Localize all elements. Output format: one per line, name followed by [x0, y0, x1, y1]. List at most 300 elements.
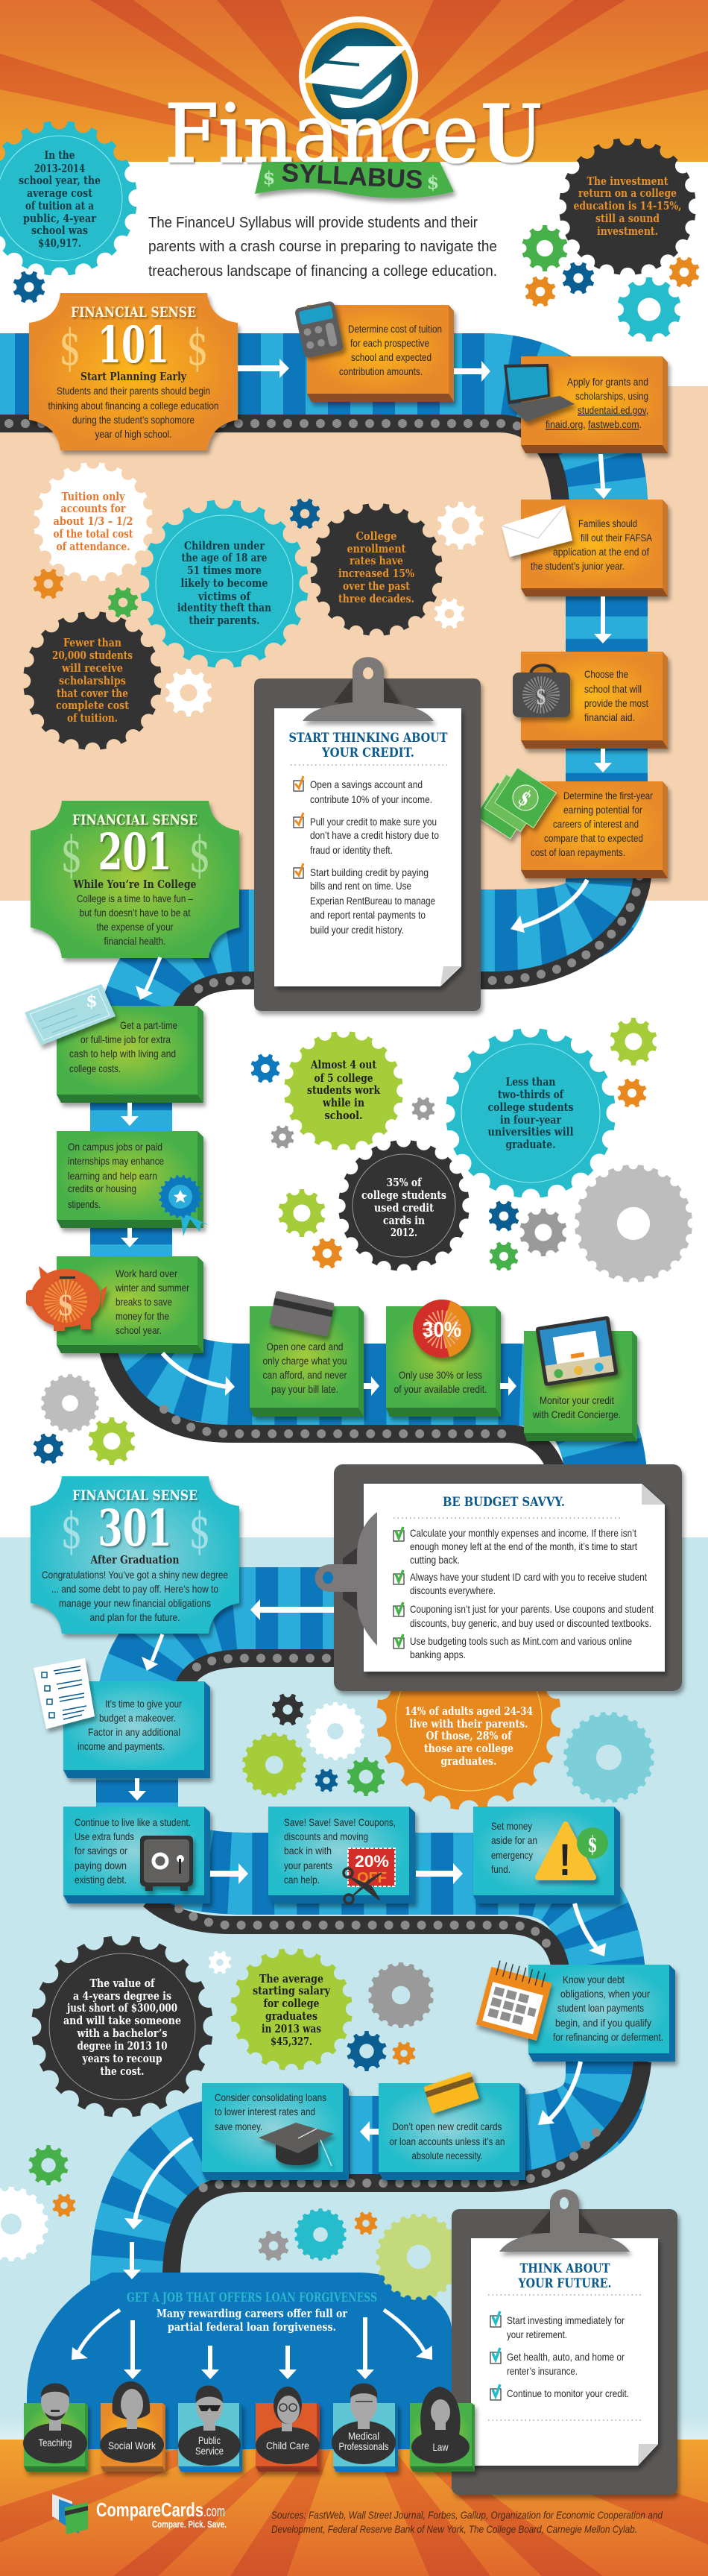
checklist: Pull your credit to make sure you: [310, 816, 437, 828]
step: open one card: [250, 1291, 364, 1417]
stat gear: value of degree: years to recoup: [82, 2052, 162, 2065]
step: use 30 percent: [386, 1300, 501, 1417]
stat gear: tuition share of attendance: Tuition only: [61, 490, 126, 503]
career tile: teaching: [23, 2383, 88, 2472]
step: part-time job: Get a part-time: [120, 1019, 177, 1031]
clipboard: start thinking about your credit: [254, 657, 481, 1011]
stat gear: tuition cost: $40,917.: [38, 236, 81, 250]
badge: financial sense 201: 201: [98, 822, 171, 881]
icon: laptop: [504, 364, 575, 422]
icon: money bag: $: [536, 681, 546, 710]
intro paragraph: treacherous landscape of financing a college education.: [148, 263, 497, 280]
stat gear: tuition cost: of tuition at a: [25, 199, 94, 212]
icon: award ribbon: [159, 1175, 209, 1236]
stat gear: graduation rate: [446, 1028, 616, 1198]
stat gear: college enrollment: increased 15%: [338, 567, 414, 580]
panel: loan forgiveness heading: partial federal loan forgiveness.: [168, 2320, 336, 2334]
step: open one card: only charge what you: [262, 1355, 347, 1367]
step: FAFSA application: application at the end of: [553, 546, 649, 558]
clipboard: start thinking about your credit: START THINKING ABOUT: [289, 731, 448, 746]
icon: yellow credit card: [423, 2071, 479, 2114]
step: emergency fund: emergency: [491, 1849, 533, 1861]
step: consolidate loans: [202, 2083, 349, 2180]
icon: coupon and scissors: OFF: [357, 1870, 387, 1886]
arrow: grants to FAFSA: [594, 454, 612, 499]
stat gear: tuition cost: school was: [31, 224, 88, 237]
icon: piggy bank: $: [57, 1285, 74, 1323]
paper: [274, 708, 461, 986]
arrow: FAFSA to school choice: [594, 596, 612, 643]
step: apply for grants: Apply for grants and: [567, 376, 648, 388]
icon: coupon and scissors: [344, 1848, 395, 1903]
step: internships: credits or housing: [68, 1182, 136, 1194]
arrow: job to internships: [121, 1103, 139, 1126]
checklist: [393, 1527, 654, 1660]
stat gear: credit card use: college students: [361, 1188, 446, 1202]
step: know your debt: student loan payments: [557, 2002, 644, 2014]
gear cluster: college section: [33, 1018, 692, 1465]
icon: warning sign and dollar coin: $: [587, 1832, 598, 1858]
checklist: Continue to monitor your credit.: [507, 2387, 629, 2399]
career tile: child care: [256, 2387, 320, 2472]
badge: financial sense 101: $: [60, 319, 80, 377]
checklist: Calculate your monthly expenses and income. If there isn’t: [410, 1527, 636, 1539]
stat gear: credit card use: 2012.: [391, 1226, 417, 1239]
stat gear: scholarships: Fewer than: [63, 636, 121, 649]
stat gear: tuition cost: school year, the: [19, 174, 101, 187]
stat gear: starting salary: $45,327.: [271, 2035, 312, 2048]
checklist: cutting back.: [410, 1554, 460, 1566]
paper: [364, 1484, 665, 1672]
step: determine cost of tuition: Determine cost of tuition: [348, 323, 442, 335]
step: budget makeover: income and payments.: [78, 1740, 165, 1752]
arrow: debt to credit cards: [538, 2062, 581, 2125]
stat gear: adults living with parents: graduates.: [441, 1754, 496, 1768]
stat gear: graduation rate: universities will: [487, 1125, 574, 1139]
arrow: clipboard to 301: [250, 1599, 334, 1620]
stat gear: value of degree: the cost.: [100, 2065, 145, 2078]
icon: piggy bank: [26, 1266, 107, 1331]
stat gear: students working: of 5 college: [315, 1071, 373, 1085]
step: first-year earning potential: Determine the first-year: [563, 790, 653, 802]
badge: financial sense 101: during the student’s sophomore: [72, 414, 195, 426]
checklist: your retirement.: [507, 2328, 567, 2340]
step: consolidate loans: to lower interest rates and: [215, 2106, 315, 2117]
step: choose school: school that will: [584, 683, 642, 695]
step: determine cost of tuition: contribution amounts.: [339, 365, 423, 377]
stat gear: identity theft: likely to become: [180, 576, 268, 590]
syllabus banner: SYLLABUS: [281, 158, 423, 195]
step: use 30 percent: Only use 30% or less: [399, 1369, 482, 1381]
step: first-year earning potential: careers of interest and: [553, 818, 639, 830]
checklist: [294, 776, 439, 936]
checklist: fraud or identity theft.: [310, 844, 393, 856]
stat gear: scholarships: scholarships: [59, 674, 126, 687]
step: determine cost of tuition: [294, 300, 454, 402]
clipboard: think about your future: YOUR FUTURE.: [518, 2276, 611, 2291]
stat gear: scholarships: [23, 611, 162, 750]
step: apply for grants: [504, 356, 668, 453]
checklist: [490, 2311, 629, 2400]
badge: financial sense 101: Start Planning Early: [80, 370, 187, 383]
stat gear: adults living with parents: [376, 1625, 561, 1810]
step: first-year earning potential: earning potential for: [563, 804, 642, 816]
stat gear: scholarships: will receive: [61, 661, 123, 675]
arrow: consolidating to career panel: [124, 2138, 192, 2229]
step: avoid new credit: [379, 2071, 525, 2180]
stat gear: value of degree: just short of $300,000: [66, 2001, 177, 2015]
step: choose school: provide the most: [584, 697, 648, 709]
clipboard: think about your future: [452, 2189, 677, 2495]
badge: financial sense 201: FINANCIAL SENSE: [72, 812, 197, 828]
stat gear: graduation rate: in four-year: [500, 1113, 562, 1127]
checklist: Use budgeting tools such as Mint.com and various online: [410, 1635, 632, 1647]
career tile: medical professionals: [332, 2383, 398, 2472]
panel: loan forgiveness heading: GET A JOB THAT OFFERS LOAN FORGIVENESS: [127, 2290, 377, 2305]
intro paragraph: [148, 215, 497, 280]
step: monitor credit: with Credit Concierge.: [532, 1408, 621, 1420]
step: work hard over breaks: winter and summer: [115, 1282, 189, 1294]
stat gear: adults living with parents: live with their parents.: [410, 1717, 528, 1731]
stat gear: identity theft: [140, 500, 309, 668]
stat gear: tuition share of attendance: accounts for: [61, 502, 126, 515]
step: first-year earning potential: [475, 768, 668, 878]
sources: Development, Federal Reserve Bank of New York, The College Board, Carnegie Mellon Cylab.: [271, 2523, 637, 2535]
stat gear: identity theft: victims of: [197, 590, 251, 603]
step: first-year earning potential: cost of loan repayments.: [531, 846, 625, 858]
stat gear: starting salary: starting salary: [253, 1984, 331, 1997]
step: determine cost of tuition: school and expected: [351, 351, 432, 363]
checklist: renter’s insurance.: [507, 2365, 578, 2377]
stat gear: college enrollment: rates have: [350, 554, 403, 567]
step: work hard over breaks: school year.: [116, 1324, 162, 1336]
stat gear: tuition cost: 2013-2014: [34, 162, 85, 175]
checklist: Start investing immediately for: [507, 2314, 625, 2326]
header logo mortarboard: [299, 16, 418, 136]
footer logo: CompareCards: .com: [203, 2504, 225, 2520]
icon: calculator: [294, 300, 344, 359]
checklist: discounts everywhere.: [410, 1584, 496, 1596]
arrow: down to career panel: [123, 2242, 141, 2279]
step: coupons: Save! Save! Save! Coupons,: [284, 1816, 396, 1828]
stat gear: scholarships: that cover the: [57, 687, 128, 700]
checklist: Couponing isn’t just for your parents. Use coupons and student: [410, 1603, 654, 1615]
step: know your debt: [476, 1959, 675, 2062]
stat gear: value of degree: a 4-years degree is: [73, 1989, 171, 2003]
stat gear: starting salary: [230, 1948, 353, 2070]
step: internships: learning and help earn: [68, 1170, 157, 1182]
badge: financial sense 301: 301: [98, 1499, 171, 1558]
step: live like a student: [63, 1807, 210, 1903]
conveyor track: [0, 374, 642, 2289]
career tile: medical professionals: Medical: [348, 2430, 379, 2442]
stat gear: starting salary: in 2013 was: [262, 2022, 321, 2035]
step: open one card: pay your bill late.: [271, 1383, 338, 1395]
icon: warning sign and dollar coin: !: [559, 1835, 571, 1885]
title FinanceU: Finance: [165, 88, 478, 181]
stat gear: adults living with parents: those are college: [424, 1742, 513, 1755]
clipboard: be budget savvy: [315, 1464, 682, 1691]
badge: financial sense 301: and plan for the future.: [89, 1611, 180, 1623]
badge: financial sense 201: $: [61, 826, 82, 884]
arrow: coupons to emergency fund: [416, 1863, 463, 1884]
stat gear: starting salary: for college: [264, 1997, 319, 2010]
stat gear: investment return: education is 14-15%,: [574, 199, 681, 212]
step: apply for grants: studentaid.ed.gov,: [578, 404, 648, 416]
step: part-time job: college costs.: [69, 1062, 121, 1074]
career tile: teaching: Teaching: [39, 2437, 72, 2449]
step: avoid new credit: or loan accounts unless it’s an: [389, 2135, 505, 2147]
icon: coupon and scissors: 20%: [355, 1852, 389, 1871]
arrow: emergency fund to debt: [575, 1903, 606, 1956]
stat gear: students working: while in: [322, 1096, 364, 1109]
stat gear: tuition cost: public, 4-year: [23, 212, 97, 225]
icon: paycheck: [25, 984, 116, 1045]
clipboard: be budget savvy: BE BUDGET SAVVY.: [443, 1495, 565, 1510]
icon: warning sign and dollar coin: [538, 1824, 608, 1885]
icon: envelope: [502, 506, 572, 557]
step: open one card: can afford, and never: [262, 1369, 347, 1381]
arrow: earning to section 201: [511, 880, 587, 933]
step: monitor credit: Monitor your credit: [540, 1394, 614, 1406]
checklist: build your credit history.: [310, 924, 404, 936]
step: internships: [57, 1131, 209, 1236]
step: consolidate loans: Consider consolidating loans: [215, 2091, 326, 2103]
title FinanceU: U: [481, 87, 542, 181]
icon: safe: [140, 1836, 193, 1891]
checklist: and report rental payments to: [310, 909, 426, 921]
footer logo: CompareCards: [52, 2494, 227, 2534]
career tile: social work: Social Work: [108, 2440, 157, 2451]
step: FAFSA application: the student’s junior year.: [531, 560, 625, 572]
step: coupons: back in with: [284, 1845, 332, 1857]
step: emergency fund: Set money: [491, 1820, 532, 1832]
stat gear: credit card use: used credit: [374, 1201, 434, 1215]
step: emergency fund: fund.: [491, 1863, 511, 1875]
stat gear: tuition share of attendance: of attendance.: [57, 540, 130, 553]
step: internships: stipends.: [68, 1198, 101, 1210]
step: know your debt: Know your debt: [563, 1974, 625, 1985]
career tile: public service: Public: [198, 2434, 221, 2446]
stat gear: identity theft: Children under: [184, 539, 265, 552]
clip: [315, 1512, 377, 1646]
stat gear: identity theft: their parents.: [189, 614, 259, 627]
checklist: bills and rent on time. Use: [310, 880, 411, 892]
badge: financial sense 301: [31, 1476, 239, 1634]
arrow: 101 to tuition: [238, 359, 289, 378]
footer logo: CompareCards: CompareCards: [96, 2498, 203, 2521]
stat gear: college enrollment: three decades.: [338, 592, 414, 605]
step: coupons: discounts and moving: [284, 1830, 368, 1842]
step: first-year earning potential: compare that to expected: [544, 832, 643, 844]
sources: [271, 2509, 663, 2535]
icon: paycheck: $: [86, 992, 98, 1011]
stat gear: tuition share of attendance: about 1/3 – 1/2: [54, 514, 133, 528]
step: FAFSA application: Families should: [578, 517, 637, 529]
checklist: discounts, buy generic, and buy used or discounted textbooks.: [410, 1617, 651, 1629]
badge: financial sense 201: $: [189, 826, 210, 884]
step: choose school: financial aid.: [584, 711, 635, 723]
checklist: banking apps.: [410, 1648, 466, 1660]
clipboard: start thinking about your credit: YOUR CREDIT.: [321, 746, 414, 760]
badge: financial sense 301: After Graduation: [90, 1553, 180, 1566]
checklist: contribute 10% of your income.: [310, 793, 432, 805]
career tile: law: Law: [432, 2441, 449, 2453]
arrow: makeover to live like a student: [128, 1778, 146, 1801]
syllabus banner: [255, 158, 454, 198]
badge: financial sense 101: FINANCIAL SENSE: [71, 304, 196, 321]
intro paragraph: The FinanceU Syllabus will provide students and their: [148, 215, 478, 231]
stat gear: investment return: investment.: [597, 224, 658, 238]
checklist: Open a savings account and: [310, 778, 423, 790]
header sunburst: [0, 0, 708, 164]
step: know your debt: for refinancing or deferment.: [553, 2031, 663, 2043]
footer sunburst: [0, 2440, 708, 2576]
step: live like a student: for savings or: [75, 1845, 127, 1857]
step: budget makeover: budget a makeover.: [99, 1712, 176, 1724]
stat gear: adults living with parents: 14% of adults aged 24-34: [405, 1704, 533, 1718]
checklist: don’t have a credit history due to: [310, 829, 439, 841]
stat gear: credit card use: [338, 1140, 470, 1271]
badge: financial sense 101: Students and their parents should begin: [57, 385, 210, 397]
stat gear: scholarships: complete cost: [56, 699, 129, 712]
stat gear: tuition cost: [0, 121, 137, 276]
stat gear: tuition cost: average cost: [27, 186, 92, 200]
stat gear: investment return: still a sound: [595, 212, 660, 225]
stat gear: college enrollment: College: [356, 529, 396, 543]
step: use 30 percent: of your available credit.: [393, 1383, 487, 1395]
stat gear: graduation rate: college students: [487, 1100, 574, 1114]
badge: financial sense 301: FINANCIAL SENSE: [72, 1487, 197, 1504]
stat gear: starting salary: graduates: [265, 2009, 317, 2023]
step: avoid new credit: Don’t open new credit cards: [392, 2120, 502, 2132]
icon: money bills: $: [513, 785, 536, 812]
arrows: to each career: [72, 2310, 432, 2379]
icon: money bag: [513, 665, 570, 717]
stat gear: investment return: [559, 138, 696, 275]
stat gear: investment return: The investment: [587, 174, 669, 188]
step: coupons: can help.: [284, 1874, 320, 1886]
syllabus banner: $: [427, 171, 439, 193]
arrow: card to 30 percent: [364, 1376, 379, 1396]
stat gear: students working: [284, 1031, 403, 1150]
stat gear: graduation rate: two-thirds of: [498, 1088, 564, 1101]
panel: loan forgiveness heading: [127, 2290, 377, 2334]
step: know your debt: begin, and if you qualify: [555, 2017, 651, 2029]
checklist: Experian RentBureau to manage: [310, 895, 435, 907]
badge: financial sense 201: [31, 801, 239, 958]
clipboard: think about your future: THINK ABOUT: [520, 2261, 610, 2276]
step: FAFSA application: [502, 500, 668, 596]
career tile: child care: Child Care: [266, 2440, 309, 2451]
intro paragraph: parents with a crash course in preparing to navigate the: [148, 239, 497, 255]
career tile: law: [410, 2387, 475, 2472]
stat gear: college enrollment: [310, 503, 443, 636]
stat gear: credit card use: cards in: [383, 1214, 425, 1227]
gear cluster: peach section: [33, 498, 484, 717]
stat gear: identity theft: the age of 18 are: [182, 551, 267, 564]
badge: financial sense 101: year of high school.: [95, 428, 171, 440]
badge: financial sense 301: $: [189, 1502, 210, 1560]
stat gear: students working: school.: [325, 1109, 362, 1122]
step: know your debt: obligations, when your: [560, 1988, 650, 2000]
stat gear: value of degree: degree in 2013 10: [78, 2039, 167, 2053]
stat gear: students working: Almost 4 out: [310, 1058, 376, 1071]
career tile: public service: Service: [195, 2445, 224, 2457]
stat gear: graduation rate: graduate.: [505, 1138, 556, 1151]
step: FAFSA application: fill out their FAFSA: [581, 532, 653, 544]
icon: tablet: [535, 1316, 619, 1386]
step: live like a student: Continue to live like a student.: [75, 1816, 191, 1828]
icon: credit card: [269, 1291, 335, 1337]
step: budget makeover: It’s time to give your: [105, 1698, 182, 1710]
step: open one card: Open one card and: [267, 1341, 343, 1352]
arrow: school to earning: [594, 749, 612, 772]
badge: financial sense 301: manage your new financial obligations: [59, 1597, 211, 1609]
badge: financial sense 101: 101: [98, 315, 169, 374]
badge: financial sense 201: the expense of your: [97, 921, 174, 933]
arrow: credit cards to consolidating: [360, 2121, 379, 2142]
gear cluster: graduate section: [0, 1693, 654, 2300]
panel: loan forgiveness heading: Many rewarding careers offer full or: [157, 2307, 348, 2320]
stat gear: scholarships: 20,000 students: [52, 649, 133, 662]
stat gear: college enrollment: enrollment: [347, 542, 406, 555]
step: part-time job: or full-time job for extra: [80, 1033, 171, 1045]
badge: financial sense 301: $: [61, 1502, 82, 1560]
step: internships: On campus jobs or paid: [68, 1141, 162, 1153]
arrow: work hard to credit card: [162, 1353, 235, 1396]
arrow: student to coupons: [210, 1863, 248, 1884]
arrow: internships to work hard: [121, 1228, 139, 1247]
stat gear: value of degree: with a bachelor’s: [77, 2027, 167, 2040]
step: live like a student: existing debt.: [75, 1874, 127, 1886]
arrow: tuition to grants: [454, 361, 490, 382]
step: consolidate loans: save money.: [215, 2120, 262, 2132]
blue career panel: [27, 2273, 452, 2449]
stat gear: value of degree: The value of: [89, 1977, 156, 1990]
step: work hard over breaks: Work hard over: [116, 1267, 177, 1279]
icon: graduation cap: [259, 2123, 334, 2166]
stat gear: adults living with parents: Of those, 28% of: [426, 1729, 513, 1742]
checklist: enough money left at the end of the month, it’s time to start: [410, 1540, 637, 1552]
icon: checklist document: [34, 1658, 95, 1729]
footer logo: CompareCards: Compare. Pick. Save.: [152, 2519, 227, 2530]
step: coupons: your parents: [284, 1859, 332, 1871]
step: apply for grants: scholarships, using: [575, 390, 648, 402]
checklist: Get health, auto, and home or: [507, 2351, 625, 2363]
step: part-time job: cash to help with living and: [69, 1048, 176, 1059]
step: emergency fund: aside for an: [491, 1834, 537, 1846]
gear cluster: header: [13, 225, 700, 341]
stat gear: value of degree: and will take someone: [63, 2014, 181, 2027]
step: work hard over breaks: money for the: [116, 1310, 169, 1322]
stat gear: scholarships: of tuition.: [67, 711, 118, 725]
stat gear: identity theft: 51 times more: [187, 564, 262, 577]
step: emergency fund: [473, 1807, 620, 1903]
step: live like a student: paying down: [75, 1859, 127, 1871]
badge: financial sense 201: but fun doesn’t have to be at: [79, 907, 191, 919]
badge: financial sense 301: Congratulations! You’ve got a shiny new degree: [42, 1569, 228, 1581]
step: work hard over breaks: breaks to save: [116, 1296, 172, 1308]
badge: financial sense 201: College is a time to have fun –: [77, 892, 193, 904]
arrow: 30 percent to monitor: [500, 1376, 516, 1396]
step: apply for grants: finaid.org, fastweb.com.: [546, 418, 642, 430]
stat gear: investment return: return on a college: [578, 186, 677, 200]
badge: financial sense 101: $: [186, 319, 209, 377]
badge: financial sense 201: financial health.: [104, 935, 165, 947]
step: budget makeover: Factor in any additional: [88, 1726, 180, 1738]
step: avoid new credit: absolute necessity.: [411, 2150, 483, 2161]
